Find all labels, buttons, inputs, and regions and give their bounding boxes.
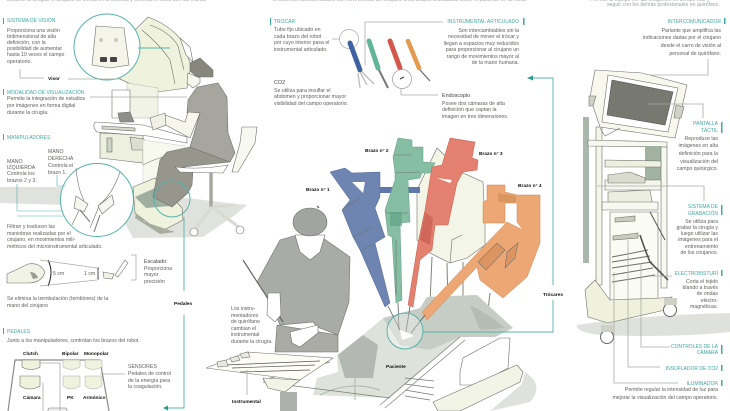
heading and text: sistema de visión: SISTEMA DE VISIÓN	[7, 17, 56, 24]
heading and text: sistema de visión: definición, con la	[7, 40, 46, 46]
text: endoscopio: imagen en tres dimensiones.	[442, 114, 508, 120]
text: electrobisturí	[652, 270, 722, 310]
text: insuflador de co2	[628, 240, 722, 372]
text: instrumental articulado	[444, 18, 524, 66]
text: instrumentadores: de quirófano	[231, 319, 260, 325]
text: instrumental articulado: necesidad de mover el trócar y	[448, 34, 519, 40]
text: escalado	[144, 259, 172, 285]
surgeon figure	[243, 206, 350, 352]
text: pantalla táctil	[648, 104, 722, 172]
arm labels: Brazo n° 4	[518, 183, 542, 189]
arm labels: Brazo n° 1	[306, 187, 330, 193]
text: pantalla táctil: definición para la	[679, 151, 718, 157]
text: sistema de grabación: luego utilizar las	[681, 231, 718, 237]
text: filtran y traducen: Filtran y traducen las	[7, 224, 56, 230]
text: endoscopio: Endoscopio	[442, 93, 470, 99]
robot arm 1: blue	[330, 168, 420, 330]
top clipped intro text: seguir con los demás profesionales en quirófano.	[607, 2, 720, 8]
diagram: pedal board: Clutch	[23, 351, 38, 357]
text: trocar: por cuyo interior pasa el	[274, 40, 329, 46]
callout circle: visor detail	[74, 14, 170, 80]
text: controles de la cámara: CÁMARA	[697, 349, 719, 356]
robot arm 3: red	[406, 138, 478, 332]
text: electrobisturí: de ondas	[697, 291, 718, 297]
heading and text: sistema de visión: tridimensional de alta	[7, 34, 56, 40]
text: electrobisturí: blando a través	[683, 285, 718, 291]
heading and text: modalidad de visualización	[3, 89, 187, 116]
text: controles de la cámara	[641, 263, 722, 356]
text: instrumentadores: durante la cirugía.	[231, 339, 273, 345]
floor shadow under console	[0, 187, 247, 238]
text: electrobisturí: ELECTROBISTURÍ	[675, 270, 719, 277]
text: sistema de grabación: imágenes para el	[678, 237, 718, 243]
text: pantalla táctil: visualización del	[680, 159, 718, 165]
robot arm 2: green	[385, 138, 435, 330]
heading and text: modalidad de visualización: MODALIDAD DE VISUALIZACIÓN	[7, 89, 85, 96]
diagram: pedal board: Armónico	[83, 395, 105, 401]
text: instrumental articulado: INSTRUMENTAL ARTICULADO	[447, 19, 519, 25]
text: co2: visibilidad del campo operatorio.	[274, 101, 348, 107]
text: sensores: de la energía para	[128, 378, 170, 384]
operator	[153, 147, 230, 207]
instrument tray	[206, 352, 333, 395]
pedales leader and arrow: Pedales	[174, 301, 192, 307]
text: sistema de grabación: de los cirujanos.	[680, 250, 718, 256]
diagram: pedal board: Cámara	[23, 395, 41, 401]
text: endoscopio: Posee dos cámaras de alta	[442, 101, 505, 107]
arm labels: Brazo n° 3	[479, 151, 503, 157]
text: pantalla táctil: Reproduce las	[685, 136, 718, 142]
diagram: pedal board	[8, 351, 125, 411]
text: trocar: cada brazo del robot	[274, 34, 322, 40]
text: co2	[274, 80, 348, 107]
diagram: pedal board: Bipolar	[62, 351, 79, 357]
robot cart structure	[417, 148, 490, 310]
text: instrumental articulado: para proporcionar al cirujano un	[446, 47, 519, 53]
text: temblores: Se elimina la trembulación (temblores) de la	[7, 296, 108, 302]
text: sistema de grabación: SISTEMA DE	[688, 204, 719, 210]
text: mano izquierda: Controla los	[7, 171, 35, 177]
text: pantalla táctil: campo quirúrgico.	[677, 166, 718, 172]
text: intercomunicador: indicaciones dadas por el cirujano	[643, 35, 721, 41]
chair	[232, 127, 257, 172]
text: instrumental articulado: rango de movimientos mayor al	[447, 54, 519, 60]
text: mano derecha: Controla el	[48, 163, 73, 169]
callout circle: hands on manipulators	[17, 164, 134, 236]
text: intercomunicador	[643, 18, 726, 75]
diagram: pedal board: PK	[67, 395, 74, 401]
heading and text: modalidad de visualización: durante la cirugía.	[7, 110, 49, 116]
text: trocar: instrumental articulado.	[274, 47, 328, 53]
text: mano izquierda: MANO	[7, 159, 23, 165]
text: co2: Se utiliza para insuflar el	[274, 88, 331, 94]
heading and text: sistema de visión: Proporciona una visión	[7, 28, 60, 34]
text: pantalla táctil: PANTALLA	[693, 121, 719, 127]
text: sensores: la coagulación.	[128, 384, 163, 390]
text: insuflador de co2: INSUFLADOR DE CO2	[666, 366, 718, 372]
text: instrumental articulado: Son intercambiables sin la	[458, 28, 519, 34]
illustration: video cart	[583, 70, 687, 344]
instruments group	[332, 22, 443, 95]
text: iluminador	[612, 272, 722, 401]
robot arm 4: orange	[411, 185, 540, 333]
text: escalado: Proporciona	[144, 266, 172, 272]
text: sensores: SENSORES	[128, 364, 157, 370]
floor shadow under video cart	[577, 313, 730, 336]
text: escalado: mayor	[144, 272, 159, 278]
text: sistema de grabación: Se utiliza para	[685, 219, 718, 225]
text: trocar: Tubo fijo ubicado en	[274, 27, 321, 33]
text: intercomunicador: desde el carro de visión al	[661, 43, 721, 49]
text: temblores: mano del cirujano	[7, 303, 48, 309]
text: electrobisturí: magnéticas.	[690, 304, 718, 310]
text: sistema de grabación: entrenamiento	[685, 244, 718, 250]
text: co2: CO2	[274, 80, 285, 86]
heading and text: modalidad de visualización: por imágenes en forma digital	[7, 103, 75, 109]
text: instrumental articulado: de la mano humana.	[472, 60, 519, 66]
top clipped intro text	[7, 0, 720, 8]
text: electrobisturí: electro-	[701, 298, 718, 304]
visor label with leaders	[20, 69, 120, 82]
text: filtran y traducen: cirujano, en movimientos mili-	[7, 237, 76, 243]
heading and text: pedales: Junto a los manipuladores, controlan los brazos del robot.	[7, 338, 140, 344]
text: iluminador: ILUMINADOR	[687, 381, 718, 387]
text: filtran y traducen: maniobras realizadas por el	[7, 231, 71, 237]
arm labels	[306, 148, 542, 193]
text: intercomunicador: personal de quirófano.	[669, 51, 721, 57]
text: intercomunicador: INTERCOMUNICADOR	[668, 19, 721, 25]
text: instrumentadores: instrumental	[231, 332, 259, 338]
text: escalado: precisión	[144, 279, 165, 285]
text: iluminador: mejorar la visualización del campo operatorio.	[612, 395, 718, 401]
illustration: surgeon console	[94, 17, 257, 236]
heading and text: sistema de visión: hasta 10 veces el campo	[7, 52, 64, 58]
text: controles de la cámara: CONTROLES DE LA	[671, 344, 719, 350]
diagram: pedal board: Monopolar	[84, 351, 109, 357]
text: endoscopio: definición que captan la	[442, 107, 497, 113]
text: co2: abdomen y proporcionar mayor	[274, 94, 346, 100]
text: sistema de grabación	[597, 186, 722, 256]
heading and text: sistema de visión: operatorio.	[7, 59, 32, 65]
text: filtran y traducen: métricos del microinstrumental articulado.	[7, 244, 103, 250]
text: iluminador: Permite regular la intensidad de luz para	[625, 387, 718, 393]
text: instrumental articulado: llegan a espacios muy reducidos	[444, 41, 519, 47]
arm labels: Brazo n° 2	[365, 148, 389, 154]
diagram: scaling hand to instrument	[7, 255, 136, 286]
text: sensores	[128, 364, 171, 390]
text: mano derecha: DERECHA	[48, 156, 74, 162]
text: intercomunicador: Parlante que amplifica las	[662, 28, 721, 34]
text: filtran y traducen	[7, 224, 103, 250]
heading and text: sistema de visión: posibilidad de aumentar	[7, 46, 62, 52]
heading and text: modalidad de visualización: Permite la integración de estudios	[7, 96, 86, 102]
text: mano derecha: MANO	[48, 149, 64, 155]
text: temblores	[7, 296, 108, 309]
label: instrumental: Instrumental	[232, 399, 261, 405]
label: paciente: Paciente	[386, 364, 406, 370]
diagram: scaling hand to instrument: 1 cm	[84, 271, 95, 277]
text: sensores: Pedales de control	[128, 371, 171, 377]
patient drape	[313, 295, 513, 400]
callout circle: pedals	[154, 181, 190, 217]
text: mano derecha	[48, 149, 74, 176]
text: pantalla táctil: TÁCTIL	[701, 127, 718, 134]
text: pantalla táctil: imágenes en alta	[678, 143, 718, 149]
text: mano izquierda	[7, 159, 37, 184]
text: sistema de grabación: GRABACIÓN	[688, 210, 718, 217]
heading: manipuladores: MANIPULADORES	[7, 135, 51, 141]
text: trocar	[270, 18, 329, 53]
heading and text: sistema de visión	[3, 17, 64, 65]
text: mano izquierda: brazos 2 y 3.	[7, 178, 37, 184]
text: electrobisturí: Corta el tejido	[686, 279, 718, 285]
visor label with leaders: Visor	[48, 76, 60, 82]
text: escalado: Escalado:	[144, 259, 168, 265]
text: sistema de grabación: grabar la cirugía y	[676, 225, 718, 231]
text: instrumentadores	[231, 306, 273, 345]
text: instrumentadores: Los instru-	[231, 306, 255, 312]
text: mano derecha: brazo 1.	[48, 170, 67, 176]
diagram: scaling hand to instrument: 5 cm	[53, 271, 64, 277]
callout circle and leader: trócares: Trócares	[543, 292, 563, 298]
text: trocar: TROCAR	[274, 19, 296, 25]
callout circle and leader: trócares	[387, 76, 563, 349]
text: endoscopio	[442, 93, 508, 120]
operating table	[263, 337, 536, 411]
text: instrumentadores: mentadores	[231, 313, 259, 319]
text: instrumentadores: cambian el	[231, 326, 256, 332]
heading and text: pedales	[3, 328, 140, 344]
heading and text: pedales: PEDALES	[7, 329, 31, 335]
text: mano izquierda: IZQUIERDA	[7, 165, 36, 171]
pedales leader and arrow	[163, 217, 192, 410]
